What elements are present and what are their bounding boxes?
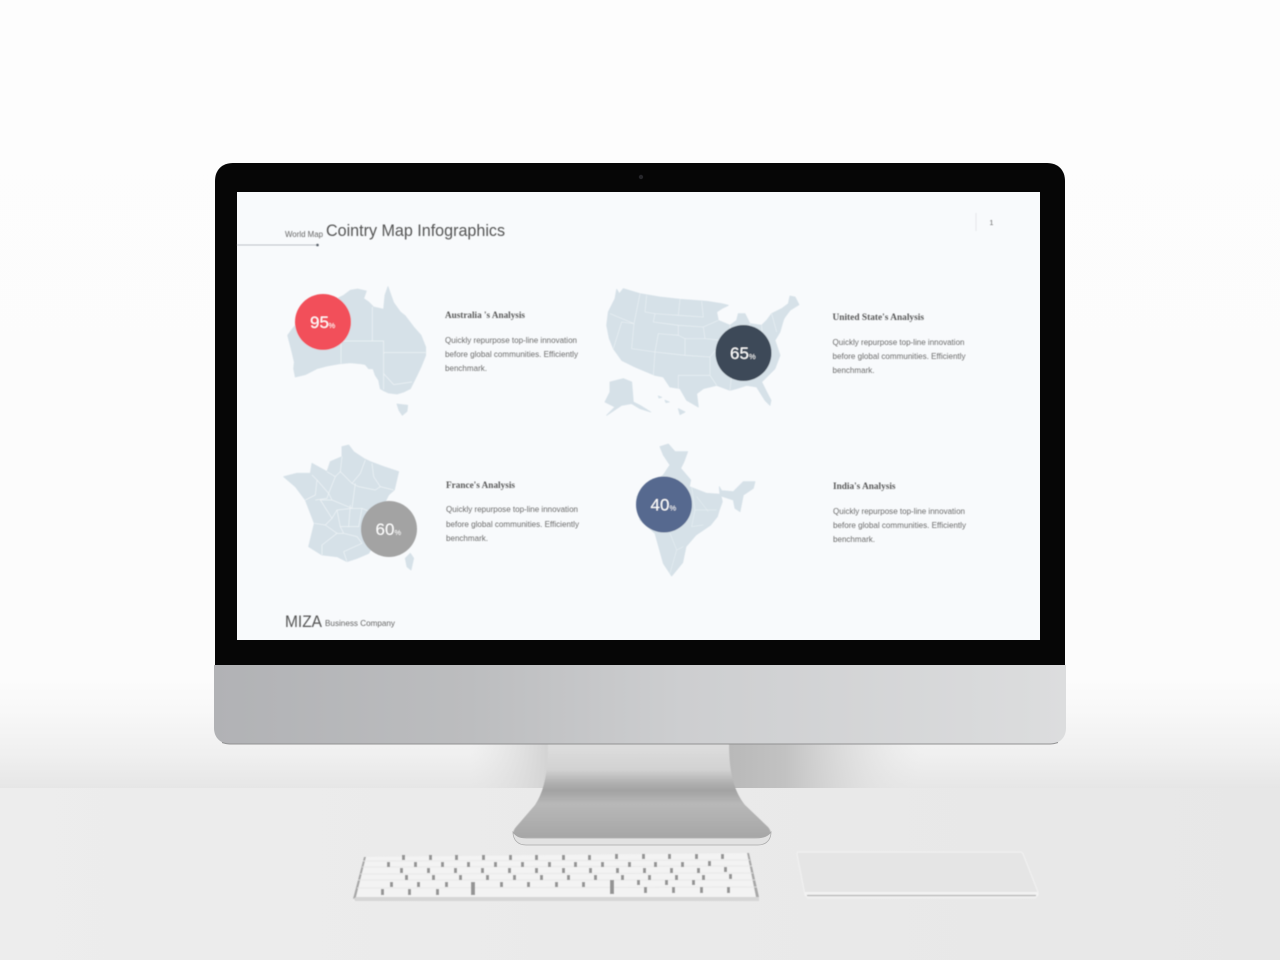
map: Australia	[288, 287, 426, 415]
map: France	[284, 445, 414, 570]
text: Australia: before global communities. Efficiently	[445, 349, 579, 359]
text: Australia: benchmark.	[445, 363, 487, 373]
panel: United States	[605, 289, 966, 415]
text: France: benchmark.	[446, 533, 488, 543]
panel: Australia	[288, 287, 579, 415]
badge: 60%	[361, 501, 417, 557]
text: India: before global communities. Efficiently	[833, 520, 967, 530]
text: India	[833, 506, 967, 544]
text: United States: before global communities. Efficiently	[832, 351, 966, 361]
footer brand	[285, 612, 396, 631]
badge: 65%: 65	[730, 344, 749, 363]
text: Australia	[445, 335, 579, 373]
footer brand: Business Company	[325, 618, 396, 628]
text: United States: Quickly repurpose top-line innovation	[832, 337, 965, 347]
footer brand: MIZA	[285, 612, 323, 631]
badge: 65%: %	[749, 352, 756, 361]
text: India: benchmark.	[833, 534, 875, 544]
keyboard	[353, 853, 759, 901]
slide content	[237, 213, 994, 631]
text: United States: benchmark.	[832, 365, 874, 375]
badge: 60%: 60	[376, 520, 394, 539]
map: India	[637, 444, 755, 576]
monitor bezel	[215, 163, 1065, 665]
screen	[237, 192, 1040, 640]
text: Australia: Quickly repurpose top-line innovation	[445, 335, 577, 345]
text: France	[446, 504, 580, 543]
page number: 1	[990, 220, 994, 227]
badge: 65%	[716, 325, 772, 381]
stand shadow on wall	[470, 744, 925, 790]
text: United States	[832, 337, 966, 375]
monitor chin	[214, 665, 1066, 744]
panel: India	[636, 444, 967, 576]
badge: 40%	[636, 476, 692, 532]
badge: 60%: %	[394, 528, 402, 537]
text: France: Quickly repurpose top-line innovation	[446, 504, 578, 514]
section label: World Map	[285, 229, 323, 239]
webcam	[639, 175, 643, 179]
map: United States	[605, 289, 799, 415]
badge: 95%: %	[328, 321, 336, 330]
heading: United States: United State's Analysis	[832, 313, 924, 323]
text: France: before global communities. Efficiently	[446, 519, 580, 529]
monitor stand	[513, 743, 771, 845]
title: Cointry Map Infographics	[326, 221, 505, 240]
title rule	[237, 244, 319, 246]
panel: France	[284, 445, 580, 570]
heading: Australia: Australia 's Analysis	[445, 311, 525, 321]
badge: 40%: 40	[650, 496, 669, 514]
page number	[976, 213, 994, 231]
badge: 95%: 95	[310, 313, 329, 332]
desk surface	[0, 788, 1280, 960]
badge: 40%: %	[670, 504, 676, 512]
text: India: Quickly repurpose top-line innovation	[833, 506, 965, 516]
chin bottom edge	[222, 742, 1058, 744]
monitor	[214, 163, 1066, 744]
badge: 95%	[295, 294, 351, 350]
trackpad	[797, 852, 1038, 898]
heading: France: France's Analysis	[446, 481, 515, 491]
heading: India: India's Analysis	[833, 482, 896, 492]
